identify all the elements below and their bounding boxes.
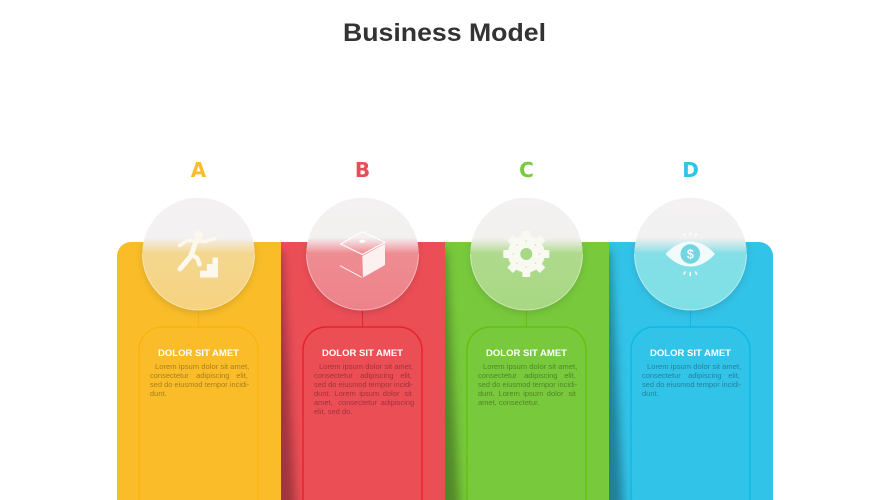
column B background: [281, 242, 445, 500]
panel: column A: [117, 158, 281, 500]
body text C: consectetur: [478, 371, 517, 380]
body text A: dunt.: [150, 389, 167, 398]
body text C: sed do eiusmod tempor incidi-: [478, 380, 578, 389]
body text D: sed do eiusmod tempor incidi-: [642, 380, 742, 389]
panel shadow B: [281, 246, 301, 500]
body text B: consectetur: [338, 398, 377, 407]
heading A: DOLOR SIT AMET: [158, 348, 240, 358]
text card D outline: [631, 327, 750, 500]
body text C: elit,: [564, 371, 576, 380]
circle shadow C: [469, 243, 584, 314]
glass circle A: [142, 198, 255, 310]
connector A: [198, 310, 200, 327]
icon: eye with dollar: [666, 233, 715, 276]
body text B: dolor: [383, 389, 400, 398]
glass rim B: [306, 254, 418, 310]
body text B: elit, sed do.: [314, 407, 352, 416]
body text A: adipiscing: [196, 371, 229, 380]
body text C: amet, consectetur.: [478, 398, 539, 407]
column A background: [117, 242, 281, 500]
panel: column B: [268, 158, 445, 500]
heading D: DOLOR SIT AMET: [650, 348, 732, 358]
icon: gear: [503, 231, 549, 277]
body text B: sed do eiusmod tempor incidi-: [314, 380, 414, 389]
body text B: adipiscing: [381, 398, 414, 407]
body text C: Lorem ipsum dolor sit amet,: [483, 362, 577, 371]
glass circle D: [634, 198, 747, 310]
body text A: elit,: [236, 371, 248, 380]
body text A: consectetur: [150, 371, 189, 380]
heading C: DOLOR SIT AMET: [486, 348, 568, 358]
body text B: ipsum: [359, 389, 379, 398]
letter D: D: [682, 158, 699, 182]
heading B: DOLOR SIT AMET: [322, 348, 404, 358]
body text C: dunt.: [478, 389, 495, 398]
body text B: consectetur: [314, 371, 353, 380]
connector D: [690, 310, 692, 327]
body text C: sit: [568, 389, 577, 398]
body text D: Lorem ipsum dolor sit amet,: [647, 362, 741, 371]
body text D: consectetur: [642, 371, 681, 380]
body text B: Lorem: [335, 389, 356, 398]
column D background: [609, 242, 773, 500]
text card A outline: [139, 327, 258, 500]
body text C: dolor: [547, 389, 564, 398]
circle shadow B: [304, 243, 420, 315]
circle shadow A: [140, 243, 257, 316]
body text C: adipiscing: [524, 371, 557, 380]
body text D: elit,: [728, 371, 740, 380]
body text D: adipiscing: [688, 371, 721, 380]
connector B: [362, 310, 364, 327]
body text A: sed do eiusmod tempor incidi-: [150, 380, 250, 389]
circle shadow D: [632, 243, 748, 315]
body text A: Lorem ipsum dolor sit amet,: [155, 362, 249, 371]
text card C outline: [467, 327, 586, 500]
body text C: [478, 362, 578, 407]
connector C: [526, 310, 528, 327]
body text D: dunt.: [642, 389, 659, 398]
column C background: [445, 242, 609, 500]
body text B: adipiscing: [360, 371, 393, 380]
icon: cube: [340, 232, 385, 278]
body text A: [150, 362, 250, 398]
glass circle B: [306, 198, 419, 310]
body text D: [642, 362, 742, 398]
body text C: ipsum: [523, 389, 543, 398]
body text B: Lorem ipsum dolor sit amet,: [319, 362, 413, 371]
text card B outline: [303, 327, 422, 500]
letter C: C: [519, 158, 534, 182]
glass rim A: [142, 254, 254, 310]
panel shadow C: [445, 246, 464, 500]
panel: column C: [432, 158, 609, 500]
body text C: Lorem: [499, 389, 520, 398]
panel: column D: [596, 158, 773, 500]
body text B: [314, 362, 414, 416]
body text B: amet,: [314, 398, 333, 407]
glass rim D: [634, 254, 746, 310]
letter B: B: [355, 158, 370, 182]
glass circle C: [470, 198, 583, 310]
body text B: dunt.: [314, 389, 331, 398]
icon: runner climbing stairs: [180, 231, 218, 278]
icon: eye with dollar: $: [687, 248, 694, 262]
body text B: sit: [404, 389, 413, 398]
letter A: A: [191, 158, 207, 182]
title: Business Model: [343, 20, 546, 47]
body text B: elit,: [400, 371, 412, 380]
panel shadow D: [609, 246, 629, 500]
glass rim C: [470, 254, 582, 310]
